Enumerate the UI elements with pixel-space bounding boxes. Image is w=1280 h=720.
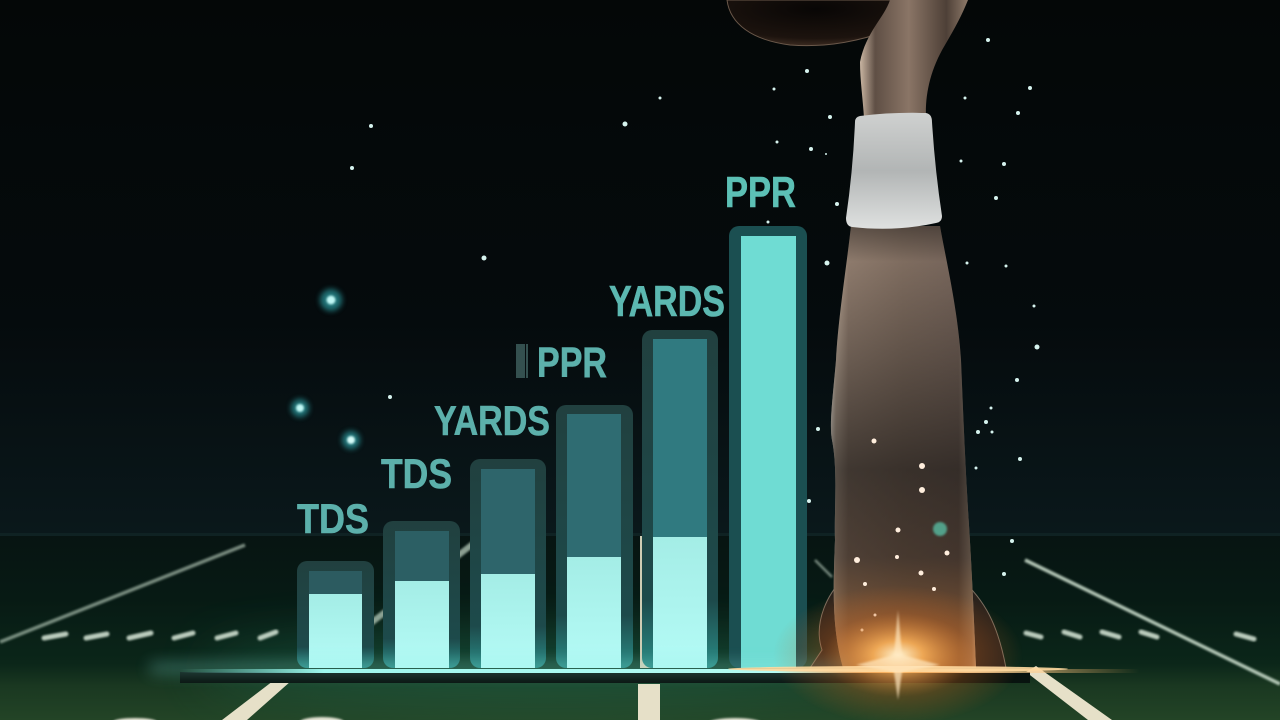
bar: YARDS 1 [470, 459, 546, 668]
bar chart [297, 168, 807, 668]
label: PPR 2: PPR [725, 168, 796, 217]
yard dashes [44, 632, 1254, 639]
hand and wrist [860, 0, 968, 118]
glowing baseline platform [150, 664, 1140, 683]
label: YARDS 2: YARDS [609, 277, 725, 326]
label: TDS 1: TDS [297, 495, 369, 542]
label: YARDS 1: YARDS [434, 397, 550, 444]
arm sparkles [854, 438, 950, 632]
label: PPR 1: PPR [537, 339, 607, 387]
cropped field numbers [113, 717, 761, 720]
football [727, 0, 905, 46]
forearm [831, 226, 976, 668]
flare [728, 585, 1068, 720]
bar: PPR 2 [729, 226, 807, 668]
bar: PPR 1 [556, 405, 633, 668]
wristband [846, 113, 942, 229]
football field [0, 533, 1280, 720]
field sidelines [0, 540, 1280, 684]
bar: TDS 2 [383, 521, 460, 668]
bar: YARDS 2 [642, 330, 718, 668]
label: TDS 2: TDS [381, 450, 452, 497]
raised arm [810, 0, 1006, 668]
star particles [350, 38, 1040, 576]
bar: TDS 1 [297, 561, 374, 668]
glowing orbs [291, 289, 360, 449]
arm base muscle [810, 578, 1006, 668]
icon: small bar glyph [516, 344, 528, 378]
field yard lines [222, 536, 1112, 720]
